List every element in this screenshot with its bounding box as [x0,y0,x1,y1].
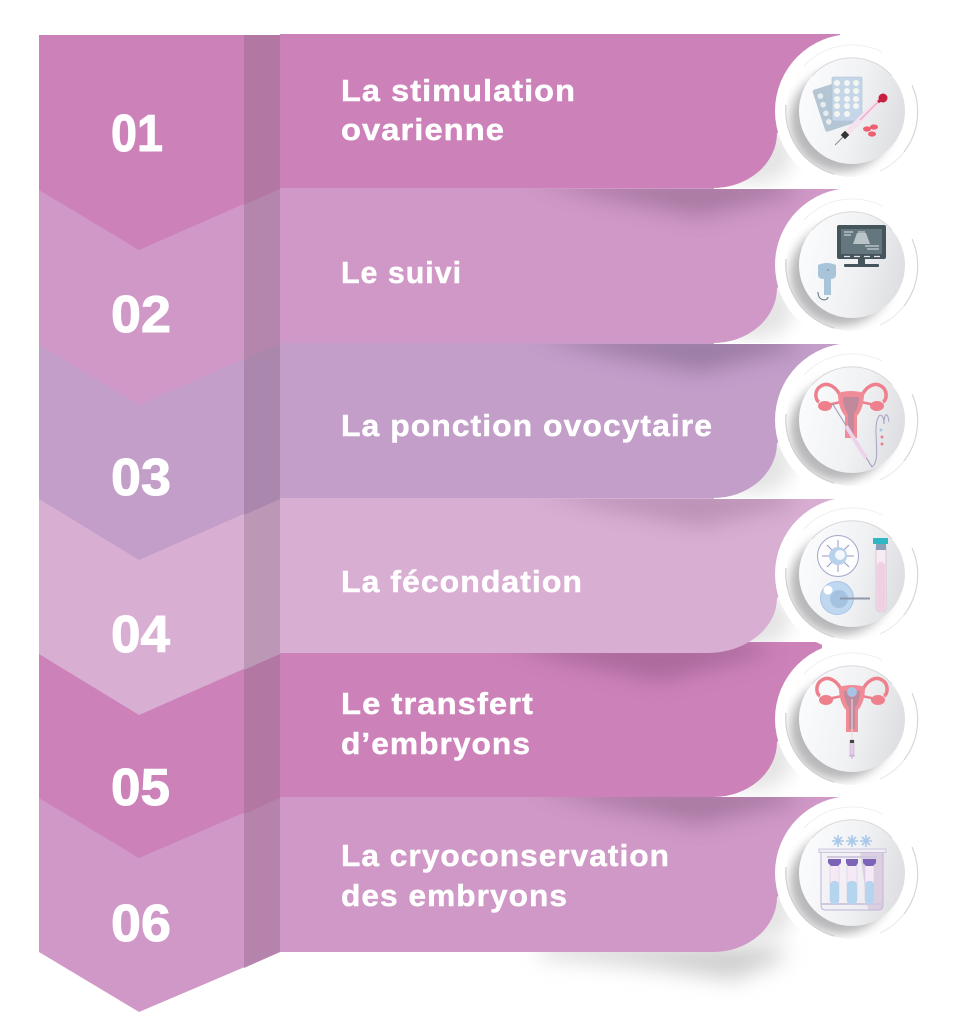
number 04: 04 [111,606,170,664]
icon: frozen tubes [775,796,929,950]
heading: le transfert: Le transfert [341,686,534,721]
dark strip [244,490,280,670]
dark strip [244,185,280,360]
heading: ovarienne: ovarienne [341,112,505,147]
number 03: 03 [111,449,171,507]
side shadow [737,288,795,343]
side shadow [741,741,794,794]
chevron and band [39,642,822,858]
heading: le suivi: Le suivi [341,255,462,290]
dark strip [244,790,280,968]
side shadow [737,132,794,188]
dark strip [244,640,280,814]
side shadow [750,598,793,642]
band shadow [540,945,790,980]
chevron and band [39,341,840,560]
icon: oocyte retrieval [775,343,929,497]
row 3: la ponction ovocytaire [39,332,929,560]
chevron and band [39,795,840,1012]
row 5: le transfert d'embryons [39,640,929,858]
heading: la cryoconservation: La cryoconservation [341,838,670,873]
side shadow [717,882,793,942]
heading: la stimulation: La stimulation [341,73,576,108]
icon: embryo transfer [775,642,929,796]
dark strip [244,340,280,515]
icon: fertilization [775,497,929,651]
top shadow [558,797,796,832]
heading: la fecondation: La fécondation [341,564,583,599]
row 1: la stimulation ovarienne [39,34,929,250]
top shadow [558,189,796,224]
top shadow [556,344,796,378]
heading: d'embryons: d’embryons [341,726,531,761]
icon: ultrasound [775,188,929,342]
number 06: 06 [111,895,171,953]
number 02: 02 [111,286,171,344]
heading: la ponction ovocytaire: La ponction ovocytaire [341,408,713,443]
icon: pills and syringe [775,34,929,188]
side shadow [737,442,795,498]
heading: des embryons: des embryons [341,878,568,913]
top shadow [500,640,775,682]
number 05: 05 [111,759,170,817]
top shadow [563,499,793,532]
row 2: le suivi [39,177,929,405]
chevron and band [39,186,840,405]
number 01: 01 [111,105,163,163]
row 4: la fecondation [39,487,929,715]
dark strip [244,35,280,205]
chevron and band [39,496,838,715]
chevron and band [39,34,840,250]
row 6: la cryoconservation [39,785,929,1012]
